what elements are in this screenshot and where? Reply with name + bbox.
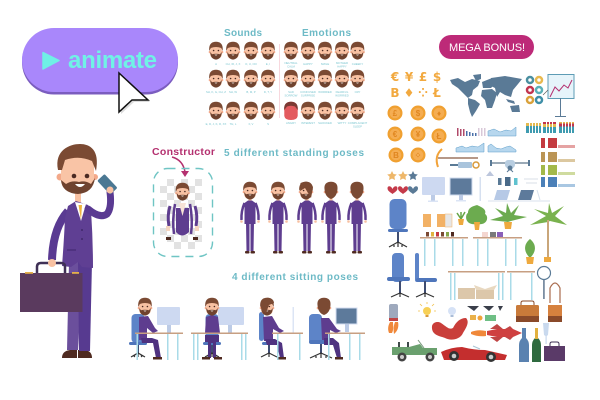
magnifying glass: [538, 266, 550, 299]
emotions grid: SMILE: [321, 62, 329, 66]
sounds mouth shape grid: D, T, Y: [264, 90, 272, 94]
sounds mouth shape grid: O, U, OO: [245, 62, 258, 66]
exploded character parts: [166, 183, 199, 240]
heading: Emotions: Emotions: [302, 28, 351, 39]
bushy plant: [466, 205, 487, 230]
constructor panel: [154, 168, 212, 256]
shoulder bag: [548, 283, 562, 322]
briefcase: [20, 263, 82, 312]
sounds mouth shape grid: [206, 42, 275, 126]
currency symbols: Ł: [432, 86, 441, 100]
office chair: [388, 199, 408, 247]
area charts: [456, 127, 516, 152]
stars: [387, 171, 418, 180]
computer monitors: [422, 177, 481, 202]
emotions grid: SORROW: [285, 94, 298, 98]
pickaxe: [437, 149, 478, 167]
currency symbols: B: [390, 86, 400, 100]
light bulbs: [418, 302, 456, 317]
stacked bar charts: [526, 122, 574, 133]
currency symbols: [390, 70, 441, 100]
emotions grid: SHOCKED: [318, 121, 332, 125]
crypto coins: €: [393, 130, 398, 139]
emotions grid: CHEEKY: [352, 62, 363, 66]
sounds mouth shape grid: SH, W: [229, 90, 237, 94]
currency symbols: $: [433, 70, 441, 84]
pose: side back: [321, 182, 341, 254]
folders and binders: [541, 138, 575, 187]
emotions grid: HAPPY: [303, 62, 313, 66]
sounds mouth shape grid: B, M, P: [246, 90, 256, 94]
pose: front: [268, 182, 288, 254]
emotions grid: SAD: [288, 90, 294, 94]
mugs: [426, 232, 503, 237]
pose: front left: [240, 182, 260, 254]
currency symbols: ⁘: [418, 86, 428, 100]
crypto coins: Ł: [437, 132, 442, 141]
hearts: [388, 186, 418, 194]
pose: three-quarter right: [297, 182, 317, 254]
gadgets: [486, 171, 538, 186]
phone: [97, 174, 117, 195]
jetpack: [388, 304, 398, 334]
mini bar charts: [457, 128, 486, 136]
accessories: [467, 306, 503, 321]
world map: [450, 74, 522, 117]
icon: mouse cursor: [119, 73, 150, 114]
standing poses row: [240, 182, 367, 254]
boxes: [458, 285, 497, 299]
emotions grid: WORRIED: [335, 94, 349, 98]
left arm: [52, 211, 68, 260]
sitting pose 3: [259, 298, 303, 360]
heading: standing poses: 5 different standing poses: [224, 148, 364, 159]
neck: [75, 190, 81, 204]
sounds mouth shape grid: CH, /R, J, X: [226, 62, 241, 66]
emotions grid: FEARFUL: [336, 90, 349, 94]
shirt and tie: [67, 202, 86, 251]
head: [56, 144, 98, 194]
crypto coins: ¥: [416, 130, 421, 139]
legs: [67, 262, 83, 350]
presentation board: [543, 74, 574, 117]
pose: back: [347, 182, 367, 254]
crypto coins: ⁘: [415, 151, 421, 160]
crypto coins: [388, 106, 446, 162]
heading: Sounds: Sounds: [224, 28, 262, 39]
blue office chairs: [387, 253, 437, 297]
desks and cardboard boxes: [448, 271, 535, 300]
sounds mouth shape grid: F, V: [249, 122, 254, 126]
green jeep: [392, 340, 437, 362]
currency symbols: ♦: [404, 86, 414, 100]
sitting poses row: [129, 298, 365, 360]
sitting pose 1: [129, 298, 183, 360]
small pie charts: [527, 77, 542, 103]
currency symbols: £: [419, 70, 427, 84]
right arm: [88, 192, 111, 216]
leafy potted plant: [525, 239, 535, 264]
crypto coins: B: [393, 151, 399, 160]
suit jacket: [62, 201, 93, 268]
brown briefcase: [516, 301, 539, 322]
currency symbols: €: [390, 70, 399, 84]
emotions grid: [284, 42, 367, 128]
emotions grid: NEUTRAL: [284, 61, 298, 65]
heading: Constructor: Constructor: [152, 146, 215, 158]
drone: [490, 160, 530, 172]
button label: animate: [68, 47, 157, 74]
businessman character: [20, 144, 117, 358]
emotions grid: SLEEP: [353, 124, 362, 128]
bags: [516, 283, 562, 322]
sitting pose 2: [191, 298, 248, 360]
badge: Mega Bonus: MEGA BONUS!: [449, 42, 525, 54]
emotions grid: CRY: [355, 90, 361, 94]
emotions grid: WITTY: [338, 121, 346, 125]
sounds mouth shape grid: A: [215, 62, 217, 66]
purple briefcase: [544, 342, 565, 361]
heading: sitting poses: 4 different sitting poses: [232, 272, 358, 283]
emotions grid: MOTHER: [336, 61, 348, 65]
palm plant: [530, 203, 567, 262]
emotions grid: INTEREST: [301, 121, 315, 125]
emotions grid: SURPRISE: [301, 94, 315, 98]
checkerboard: [160, 179, 202, 249]
emotions grid: WORRIED: [318, 90, 332, 94]
desks with mugs: [420, 232, 522, 266]
emotions grid: CONFUSED: [300, 90, 316, 94]
shoes: [62, 350, 92, 358]
spiky plant: [490, 203, 527, 229]
arrow: constructor: [172, 157, 189, 177]
red sports car: [441, 346, 507, 362]
sounds mouth shape grid: TH, L: [230, 122, 237, 126]
emotions grid: ANGRY: [286, 121, 296, 125]
emotions grid: HAPPY: [337, 64, 347, 68]
small plant: [457, 212, 465, 225]
sounds mouth shape grid: SH, K, G, CH, Z: [206, 90, 226, 94]
badge: Mega Bonus: [439, 35, 534, 59]
sitting pose 4: [309, 298, 365, 360]
emotions grid: CALM: [287, 64, 296, 68]
laptops: [488, 190, 550, 201]
crypto coins: £: [393, 109, 398, 118]
emotions grid: COMPLACENT: [348, 121, 367, 125]
sounds mouth shape grid: E, D, J, K, R, XX: [206, 122, 226, 126]
hand on briefcase handle: [48, 259, 56, 267]
red splash: [432, 318, 468, 340]
drill: [450, 162, 479, 168]
plants: [457, 203, 567, 264]
icon: play triangle: [43, 52, 59, 69]
angry red face: [284, 102, 298, 120]
rocket: [471, 324, 522, 342]
animate button: [22, 28, 178, 94]
orange folders: [423, 214, 452, 227]
sounds mouth shape grid: E, I: [266, 62, 270, 66]
crypto coins: ♦: [437, 109, 441, 118]
sounds mouth shape grid: S: [267, 122, 269, 126]
currency symbols: ¥: [405, 70, 414, 84]
bottles and glass: [519, 323, 549, 362]
crypto coins: $: [416, 109, 421, 118]
